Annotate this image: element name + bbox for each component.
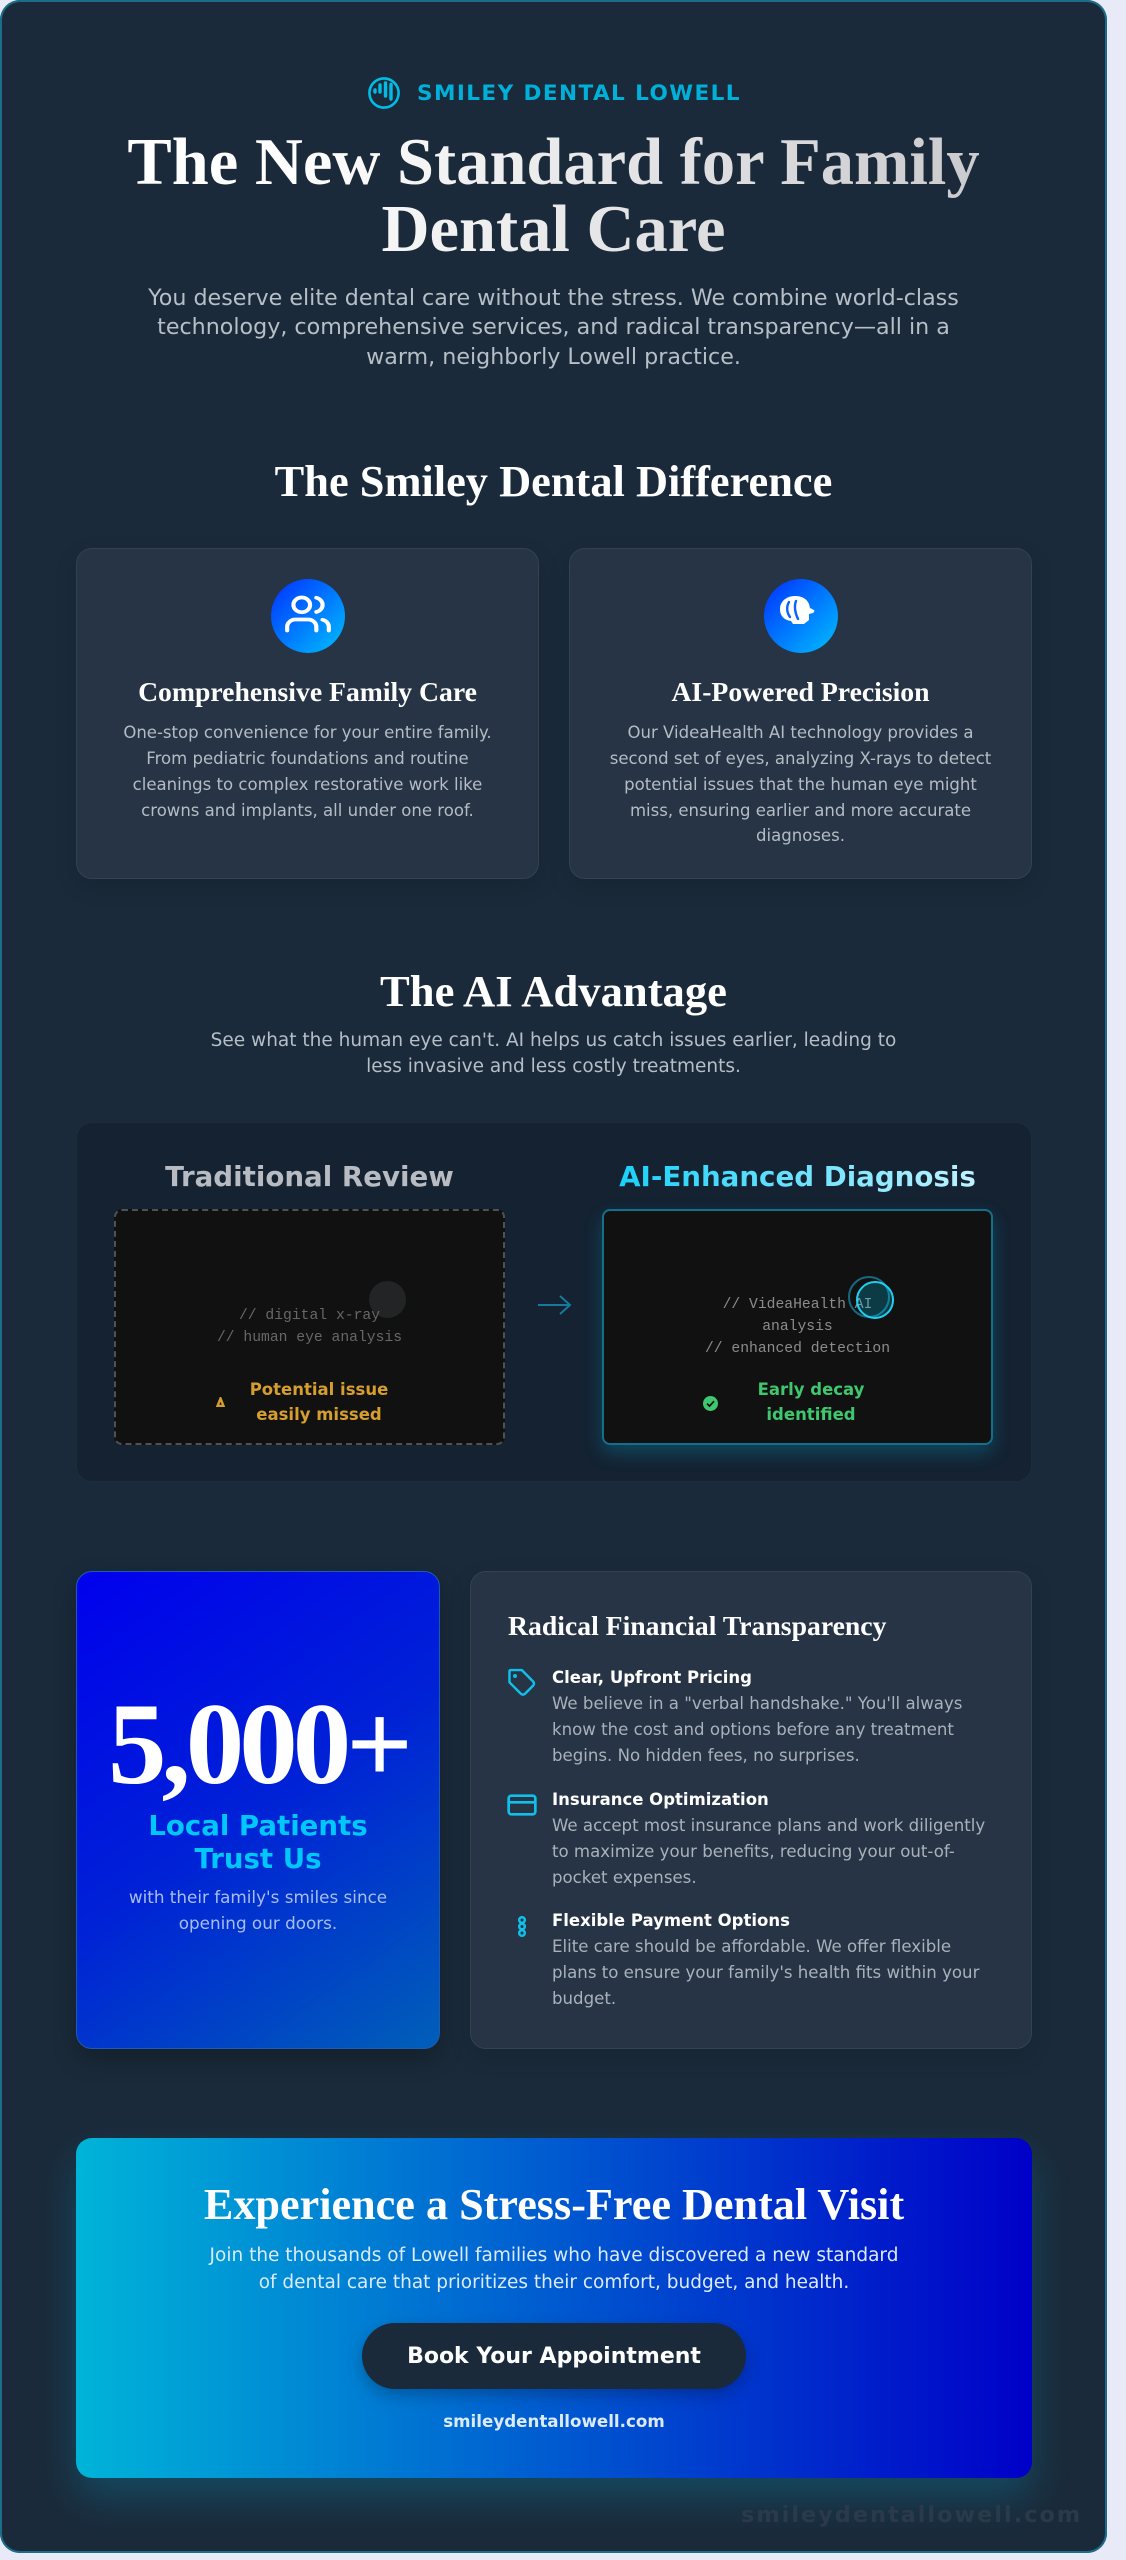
- big number: 5,000+: [108, 1680, 408, 1809]
- traditional heading: Traditional Review: [165, 1160, 454, 1192]
- warning status: [250, 1380, 388, 1424]
- icon: brain: [764, 579, 838, 653]
- item text: We believe in a "verbal handshake." You'll always: [552, 1694, 962, 1713]
- item text: [552, 1694, 962, 1765]
- warning status: Potential issue: [250, 1380, 388, 1398]
- item text: to maximize your benefits, reducing your out-of-: [552, 1842, 955, 1861]
- item text: begins. No hidden fees, no surprises.: [552, 1746, 860, 1765]
- code comment: // digital x-ray: [239, 1308, 380, 1324]
- item text: [552, 1816, 985, 1887]
- card description: crowns and implants, all under one roof.: [141, 801, 474, 820]
- icon: tag: [508, 1668, 536, 1696]
- panel: patient stat: [76, 1571, 440, 2049]
- success status: Early decay: [758, 1380, 864, 1398]
- card title: AI-Powered Precision: [671, 676, 930, 707]
- stat label: Local Patients: [148, 1809, 368, 1842]
- item text: We accept most insurance plans and work diligently: [552, 1816, 985, 1835]
- section subtitle: See what the human eye can't. AI helps us catch issues earlier, leading to: [211, 1030, 896, 1051]
- stat note: with their family's smiles since: [129, 1887, 387, 1907]
- item text: Elite care should be affordable. We offer flexible: [552, 1937, 951, 1956]
- stat label: Trust Us: [194, 1842, 322, 1875]
- card description: From pediatric foundations and routine: [146, 749, 469, 768]
- traditional x-ray box: [114, 1209, 505, 1445]
- stat note: [129, 1887, 387, 1933]
- code comment: // human eye analysis: [217, 1330, 402, 1346]
- icon: arrow: [538, 1295, 572, 1315]
- title: Dental Care: [381, 193, 726, 266]
- warning icon: [216, 1397, 225, 1407]
- success status: [758, 1380, 864, 1424]
- icon: logo: [368, 77, 400, 109]
- card description: [123, 723, 492, 820]
- stat note: opening our doors.: [179, 1913, 337, 1933]
- button: [362, 2323, 746, 2389]
- card description: [610, 723, 991, 845]
- code comment: // VideaHealth AI: [723, 1297, 872, 1313]
- intro text: You deserve elite dental care without the stress. We combine world-class: [148, 284, 959, 310]
- cta text: Join the thousands of Lowell families who have discovered a new standard: [210, 2245, 898, 2266]
- button: Book Your Appointment: [407, 2344, 701, 2369]
- detection marker: [856, 1281, 894, 1319]
- check icon: [703, 1396, 718, 1411]
- item: payment: [518, 1911, 980, 2008]
- card description: miss, ensuring earlier and more accurate: [630, 801, 971, 820]
- brand name: SMILEY DENTAL LOWELL: [417, 81, 741, 106]
- card title: Comprehensive Family Care: [138, 676, 477, 707]
- code comment: [217, 1308, 402, 1346]
- intro text: technology, comprehensive services, and radical transparency—all in a: [157, 314, 950, 340]
- ai heading: AI-Enhanced Diagnosis: [619, 1160, 976, 1192]
- warning status: easily missed: [256, 1405, 382, 1424]
- icon: credit card: [507, 1794, 537, 1816]
- code comment: analysis: [762, 1319, 833, 1335]
- ai x-ray box: [602, 1209, 993, 1445]
- card description: cleanings to complex restorative work like: [133, 775, 482, 794]
- heading: ai advantage: The AI Advantage: [380, 966, 727, 1016]
- card description: diagnoses.: [756, 826, 845, 845]
- panel: financial transparency: [470, 1571, 1032, 2049]
- card description: potential issues that the human eye might: [624, 775, 977, 794]
- heading: difference: The Smiley Dental Difference: [275, 456, 832, 506]
- cta text: [208, 2245, 898, 2292]
- intro text: [148, 284, 959, 370]
- watermark: smileydentallowell.com: [741, 2502, 1082, 2528]
- item text: pocket expenses.: [552, 1868, 697, 1887]
- section subtitle: less invasive and less costly treatments.: [366, 1056, 741, 1077]
- item title: Clear, Upfront Pricing: [552, 1668, 752, 1687]
- item text: know the cost and options before any treatment: [552, 1720, 954, 1739]
- item title: Insurance Optimization: [552, 1790, 769, 1809]
- website link: smileydentallowell.com: [443, 2411, 665, 2431]
- panel: family care: [76, 548, 539, 879]
- card description: Our VideaHealth AI technology provides a: [628, 723, 973, 742]
- card description: One-stop convenience for your entire family.: [123, 723, 492, 742]
- panel: comparison: [76, 1122, 1032, 1482]
- detection pulse: [848, 1276, 890, 1318]
- code comment: [705, 1297, 890, 1357]
- card description: second set of eyes, analyzing X-rays to detect: [610, 749, 991, 768]
- panel: ai precision: [569, 548, 1032, 879]
- faint spot: [369, 1281, 406, 1318]
- section subtitle: [211, 1030, 896, 1077]
- cta text: of dental care that prioritizes their comfort, budget, and health.: [259, 2272, 849, 2292]
- title: [0, 129, 1107, 263]
- item text: plans to ensure your family's health fits within your: [552, 1963, 979, 1982]
- success status: identified: [766, 1405, 856, 1424]
- icon: people: [271, 579, 345, 653]
- item title: Flexible Payment Options: [552, 1911, 790, 1930]
- intro text: warm, neighborly Lowell practice.: [366, 344, 741, 370]
- item: insurance: [507, 1790, 985, 1887]
- cta heading: Experience a Stress-Free Dental Visit: [204, 2180, 904, 2229]
- header: [127, 77, 980, 370]
- item text: budget.: [552, 1989, 616, 2008]
- item text: [552, 1937, 980, 2008]
- icon: payment chain: [518, 1916, 526, 1937]
- stat label: [148, 1809, 368, 1875]
- financial heading: Radical Financial Transparency: [508, 1610, 886, 1641]
- panel: call to action: [76, 2138, 1032, 2478]
- item: pricing: [508, 1668, 962, 1765]
- title: The New Standard for Family: [127, 126, 980, 199]
- code comment: // enhanced detection: [705, 1341, 890, 1357]
